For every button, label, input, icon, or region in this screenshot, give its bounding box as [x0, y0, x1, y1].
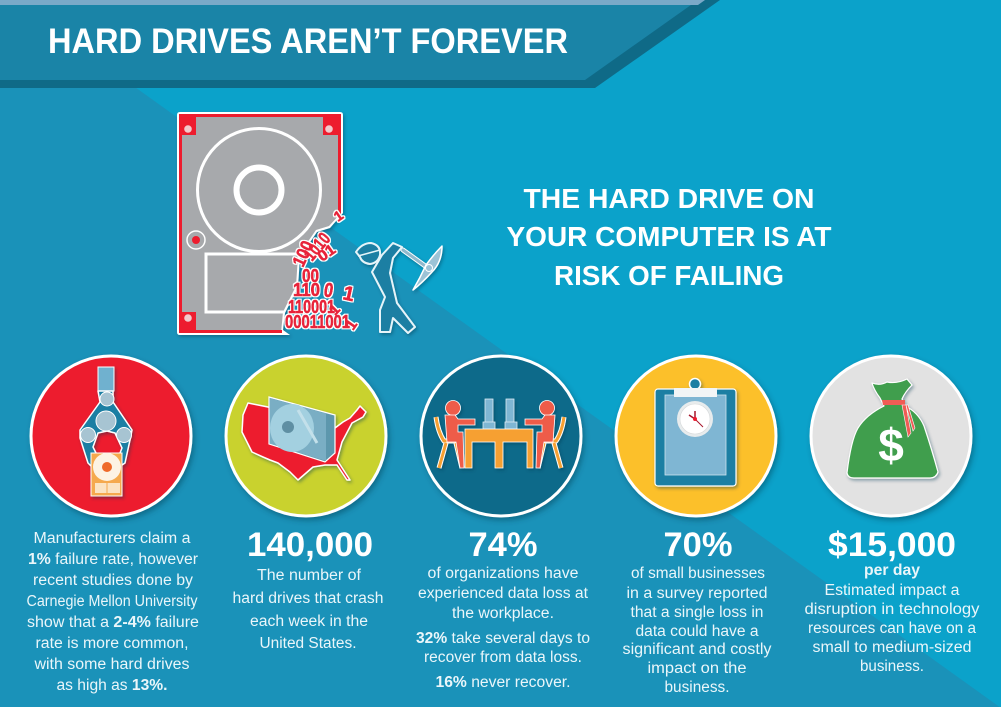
text: disruption description: resources can have on a	[808, 620, 976, 637]
person and chair: right	[525, 400, 564, 468]
text: failure rate description: recent studies done by	[33, 572, 193, 589]
title: HARD DRIVES AREN’T FOREVER	[48, 22, 568, 61]
binary digits: 1	[331, 207, 346, 224]
text: disruption description: Estimated impact a	[824, 582, 960, 599]
text: failure rate description: as high as 13%.	[56, 677, 168, 694]
pickaxe	[403, 246, 442, 290]
binary digits: 1	[326, 301, 344, 319]
text: crash description	[232, 567, 384, 652]
text: data loss description: of organizations have	[428, 565, 578, 582]
circle: olive	[226, 356, 386, 516]
text: failure rate description: Manufacturers claim a	[34, 530, 191, 547]
text: business impact description: in a survey reported	[626, 585, 768, 602]
circle: grey	[811, 356, 971, 516]
text: disruption description: business.	[860, 658, 924, 675]
text: crash description: hard drives that crash	[232, 590, 384, 607]
text: business impact description: impact on the	[648, 660, 746, 677]
text: failure rate description: Carnegie Mellon University	[26, 593, 198, 610]
binary digits: 01	[315, 241, 339, 265]
binary digits: 1	[342, 317, 361, 333]
text: data loss description	[416, 565, 590, 691]
panel: failure rate	[26, 356, 199, 694]
stat: $15,000: $15,000	[828, 526, 956, 564]
icon: US map with hard drive	[242, 397, 366, 480]
text: business impact description: of small businesses	[631, 565, 765, 582]
circle: yellow	[616, 356, 776, 516]
icon: miner with pickaxe	[356, 243, 442, 333]
panel: data loss	[416, 356, 590, 691]
text: failure rate description: rate is more common,	[36, 635, 188, 652]
title banner	[0, 0, 720, 88]
icon: money bag	[847, 379, 938, 478]
text: failure rate description: with some hard drives	[33, 656, 190, 673]
binary digits: 110001	[288, 297, 335, 317]
icon: people at a table with monitors	[436, 399, 564, 468]
text: disruption description: per day	[864, 562, 920, 579]
binary digits: 0	[322, 279, 335, 302]
binary digits: 1010	[300, 229, 334, 265]
text: failure rate description	[26, 530, 199, 694]
stat: 140,000: 140,000	[247, 526, 373, 564]
text: disruption description: small to medium-sized	[812, 639, 972, 656]
heading: THE HARD DRIVE ON	[524, 183, 814, 214]
text: business impact description: significant and costly	[622, 641, 772, 658]
text: business impact description: business.	[664, 679, 730, 696]
circle: red	[31, 356, 191, 516]
heading	[506, 183, 832, 291]
text: disruption description	[804, 562, 980, 675]
text: data loss description: 16% never recover.	[436, 674, 570, 691]
text: business impact description	[622, 565, 772, 696]
heading: RISK OF FAILING	[554, 260, 784, 291]
person and chair: left	[436, 400, 475, 468]
text: crash description: The number of	[257, 567, 362, 584]
platter	[198, 128, 320, 252]
text: data loss description: 32% take several days to	[416, 630, 590, 647]
binary digits	[285, 207, 361, 333]
panel: small businesses	[616, 356, 776, 696]
binary digits: 100	[288, 238, 318, 270]
dollar sign: $	[878, 419, 904, 471]
circle: teal	[421, 356, 581, 516]
text: crash description: each week in the	[250, 613, 368, 630]
icon: robotic claw holding hard drive	[80, 367, 132, 496]
binary digits: 1	[341, 282, 356, 306]
text: failure rate description: 1% failure rate, however	[28, 551, 198, 568]
binary digits: 00	[302, 266, 319, 286]
text: failure rate description: show that a 2-4% failure	[27, 614, 199, 631]
heading: YOUR COMPUTER IS AT	[506, 221, 832, 252]
stat: 74%: 74%	[468, 526, 538, 564]
text: data loss description: the workplace.	[452, 605, 554, 622]
text: data loss description: experienced data loss at	[418, 585, 589, 602]
binary digits: 00011001	[285, 312, 350, 332]
text: business impact description: that a single loss in	[630, 604, 764, 621]
stat: 70%: 70%	[664, 526, 732, 564]
icon: crumbling hard drive	[177, 112, 361, 335]
text: crash description: United States.	[260, 635, 356, 652]
panel: disruption cost	[804, 356, 980, 675]
text: business impact description: data could have a	[636, 623, 759, 640]
icon: clipboard with clock	[655, 378, 736, 486]
text: data loss description: recover from data loss.	[424, 649, 582, 666]
panel: drives that crash	[226, 356, 386, 652]
binary digits: 110	[293, 280, 320, 300]
text: disruption description: disruption in technology	[804, 601, 980, 618]
